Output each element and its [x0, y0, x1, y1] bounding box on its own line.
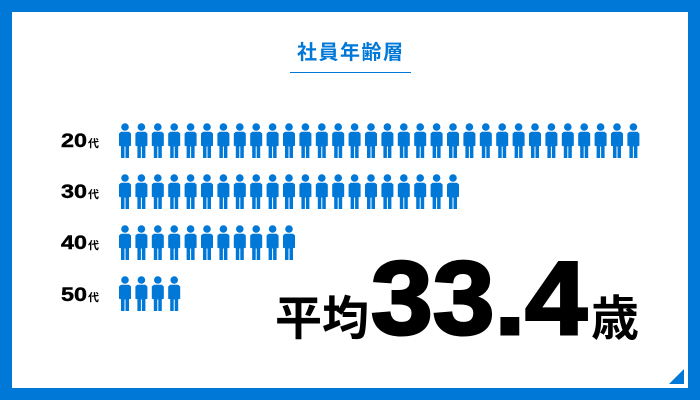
row label: 40代: 40 [61, 233, 87, 254]
title underline [290, 72, 411, 73]
corner triangle [669, 369, 684, 384]
average age headline [275, 241, 639, 357]
row label: 50代: 代 [88, 291, 99, 304]
row label: 20代: 20 [61, 131, 87, 152]
pictogram row: 20代 32 people [119, 123, 639, 158]
row label: 40代: 代 [88, 239, 99, 252]
title: 社員年齢層 [297, 41, 403, 64]
pictogram row: 40代 11 people [119, 225, 295, 260]
pictogram row: 50代 4 people [119, 276, 180, 311]
row label: 20代 [61, 131, 99, 152]
row label: 50代 [61, 285, 99, 306]
row label: 20代: 代 [88, 137, 99, 150]
pictogram row: 30代 21 people [119, 174, 459, 209]
average age headline: 平均 [275, 292, 369, 345]
row label: 40代 [61, 233, 99, 254]
row label: 30代 [61, 182, 99, 203]
row label: 30代: 代 [88, 188, 99, 201]
row label: 30代: 30 [61, 182, 87, 203]
row label: 50代: 50 [61, 285, 87, 306]
average age headline: 33.4 [371, 241, 587, 357]
average age headline: 歳 [591, 293, 639, 346]
